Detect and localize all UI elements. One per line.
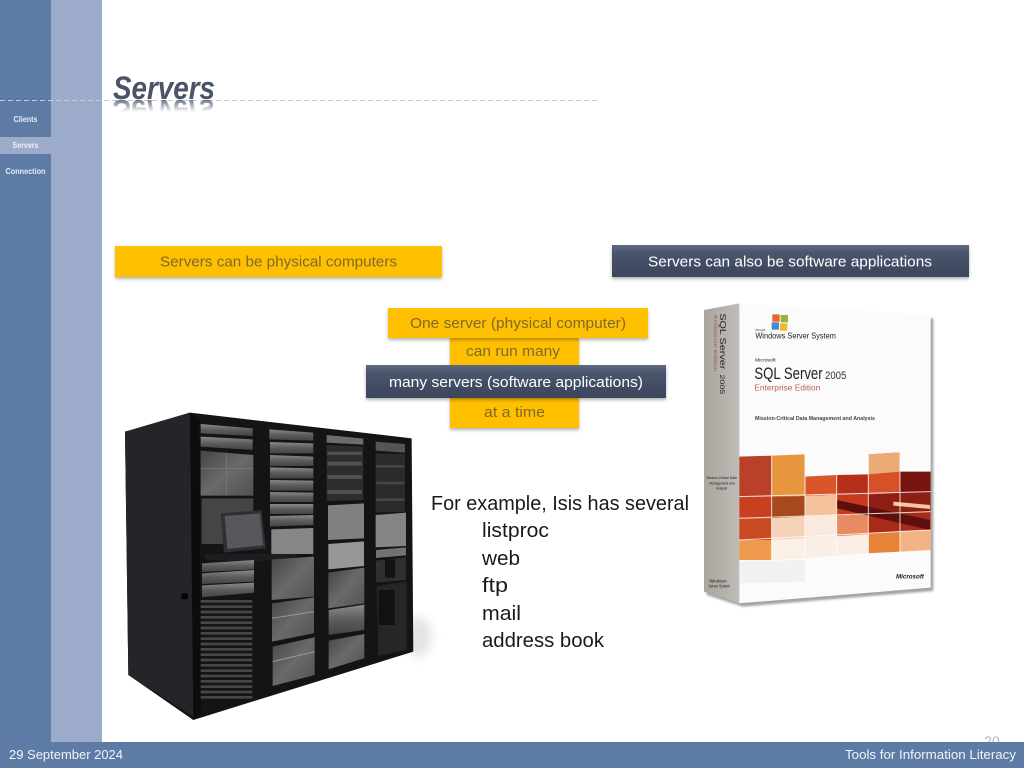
box art: product text: SQL Server — [754, 364, 823, 383]
rack 2 — [269, 429, 313, 527]
box art: product text: Mission-Critical Data Management and Analysis — [755, 416, 875, 422]
box art: product text: Enterprise Edition — [754, 382, 821, 392]
callout: physical computers: Servers can be physical computers — [160, 254, 397, 270]
box art: spine text — [707, 313, 737, 589]
title: Servers — [113, 70, 215, 106]
text block: Isis servers — [431, 492, 689, 652]
box art: spine text: Server System — [708, 584, 730, 589]
footer bar — [0, 742, 1024, 768]
nav item: Clients: Clients — [14, 115, 38, 124]
box art: logo — [772, 314, 788, 331]
stacked statement — [366, 308, 666, 428]
title — [113, 76, 214, 112]
box art: spine text: SQL Server — [718, 313, 728, 370]
box: many servers — [366, 365, 666, 398]
box: can run many: can run many — [466, 344, 561, 360]
box art: spine text: Management and — [709, 481, 735, 485]
box: can run many — [450, 338, 579, 366]
box art: spine text: 2005 — [718, 374, 724, 395]
box art: spine text: Analysis — [716, 487, 728, 491]
box: one server: One server (physical computer) — [410, 316, 626, 332]
text block: Isis servers: mail — [482, 602, 521, 625]
box: at a time — [450, 397, 579, 428]
footer: date: 29 September 2024 — [9, 747, 123, 762]
nav item: Servers: Servers — [12, 141, 39, 150]
box art: product text — [754, 328, 925, 581]
sidebar — [0, 0, 102, 742]
box art: product text: Microsoft — [896, 574, 925, 581]
rack 4 — [376, 442, 405, 453]
box art: product text: 2005 — [825, 370, 846, 382]
box art: coloured band — [739, 452, 931, 583]
footer: course title: Tools for Information Literacy — [845, 747, 1017, 762]
image: SQL Server 2005 box — [704, 303, 933, 607]
text block: Isis servers: web — [481, 547, 520, 570]
box: one server — [388, 308, 648, 338]
box art: spine text: Mission-Critical Data — [707, 476, 737, 480]
text block: Isis servers: For example, Isis has several — [431, 492, 689, 515]
text block: Isis servers: listproc — [482, 519, 549, 542]
title: Servers — [113, 93, 215, 129]
callout: software applications — [612, 245, 969, 277]
page number: 20 — [984, 733, 1000, 749]
nav item: Connection: Connection — [6, 167, 46, 176]
rack 1 — [201, 424, 253, 436]
image: server racks — [125, 413, 432, 720]
rack 3 — [327, 435, 363, 445]
box: many servers: many servers (software applications) — [389, 375, 643, 391]
box art: spine text: Enterprise Edition — [712, 315, 718, 372]
text block: Isis servers: ftp — [482, 574, 508, 597]
box: at a time: at a time — [484, 405, 545, 421]
text block: Isis servers: address book — [482, 629, 605, 652]
box art: product text: Microsoft — [755, 328, 765, 332]
callout: software applications: Servers can also be software applications — [648, 254, 932, 270]
callout: physical computers — [115, 246, 442, 277]
box art: product text: Microsoft — [755, 358, 776, 364]
box art: product text: Windows Server System — [755, 332, 836, 341]
box art: spine text: Windows — [709, 578, 727, 583]
